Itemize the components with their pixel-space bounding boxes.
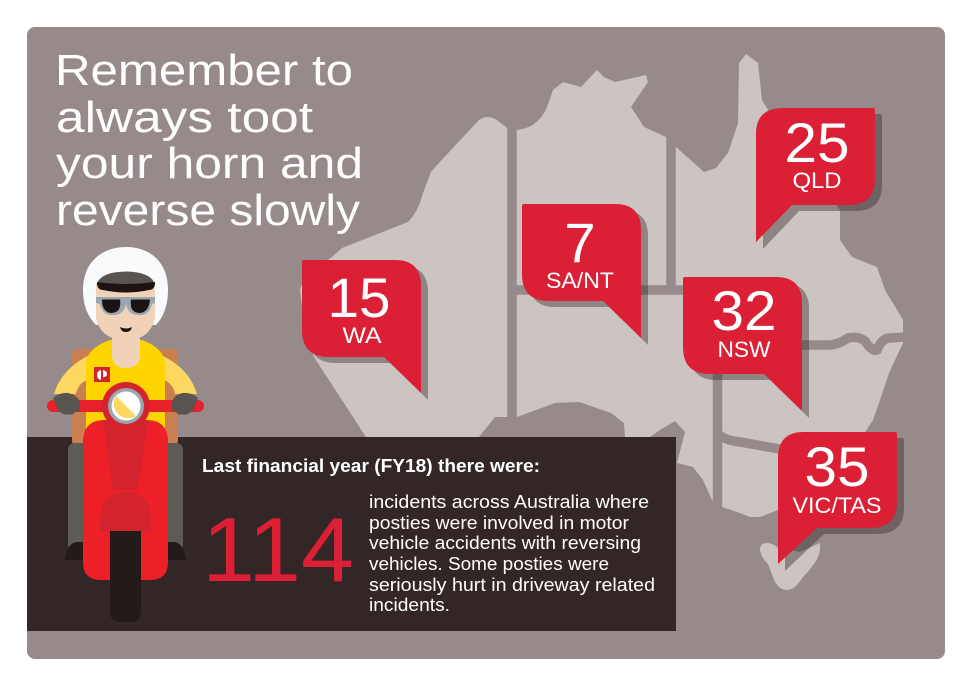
scooter body — [83, 420, 168, 580]
callout: NSW — [683, 277, 809, 418]
callout: WA: 15 — [328, 266, 390, 329]
sleeves — [54, 355, 197, 394]
map: state borders — [512, 128, 906, 512]
Australia Post badge — [94, 367, 110, 382]
helmet — [83, 247, 168, 325]
gloves — [53, 393, 198, 415]
statistics description: incidents. — [369, 595, 450, 615]
callout: WA: WA — [342, 323, 382, 348]
callout: SA/NT: SA/NT — [546, 268, 614, 293]
callout: QLD: QLD — [792, 168, 842, 193]
statistics description: vehicles. Some posties were — [369, 554, 609, 574]
hi-vis vest — [86, 340, 165, 440]
handlebar — [47, 400, 204, 412]
heading — [55, 46, 363, 235]
map: Tasmania — [760, 543, 820, 590]
front fender — [100, 492, 151, 531]
callout: VIC/TAS: 35 — [804, 435, 870, 498]
big number 114: 114 — [202, 500, 354, 601]
front wheel — [110, 531, 141, 622]
legs and shoes — [65, 443, 186, 560]
neck — [112, 330, 140, 368]
callout: QLD: 25 — [784, 111, 850, 174]
callout: QLD — [756, 108, 882, 249]
heading: Remember to — [55, 46, 353, 95]
callout: SA/NT — [522, 204, 648, 345]
statistics description: incidents across Australia where — [369, 492, 649, 512]
scooter centre panel — [103, 420, 148, 490]
heading: your horn and — [56, 139, 363, 188]
map: Australia — [300, 54, 906, 590]
callout: NSW: 32 — [712, 279, 776, 342]
mouth — [120, 327, 132, 332]
callout: VIC/TAS: VIC/TAS — [792, 493, 882, 518]
callout: SA/NT: 7 — [564, 211, 596, 274]
backpack — [72, 349, 178, 445]
heading: always toot — [56, 93, 313, 142]
callout: WA — [302, 260, 428, 400]
statistics description: seriously hurt in driveway related — [369, 575, 655, 595]
sunglasses — [96, 297, 155, 315]
statistics description: vehicle accidents with reversing — [369, 533, 641, 553]
face — [96, 283, 155, 340]
statistics description — [369, 492, 655, 615]
heading: reverse slowly — [56, 186, 360, 235]
callout: VIC/TAS — [778, 432, 904, 571]
callout: NSW: NSW — [718, 337, 771, 362]
headlight — [102, 382, 150, 430]
panel: statistics — [27, 437, 676, 631]
statistics description: posties were involved in motor — [369, 513, 629, 533]
statistics heading: Last financial year (FY18) there were: — [202, 456, 540, 476]
hat — [97, 272, 155, 292]
illustration: postie on scooter — [47, 247, 204, 622]
